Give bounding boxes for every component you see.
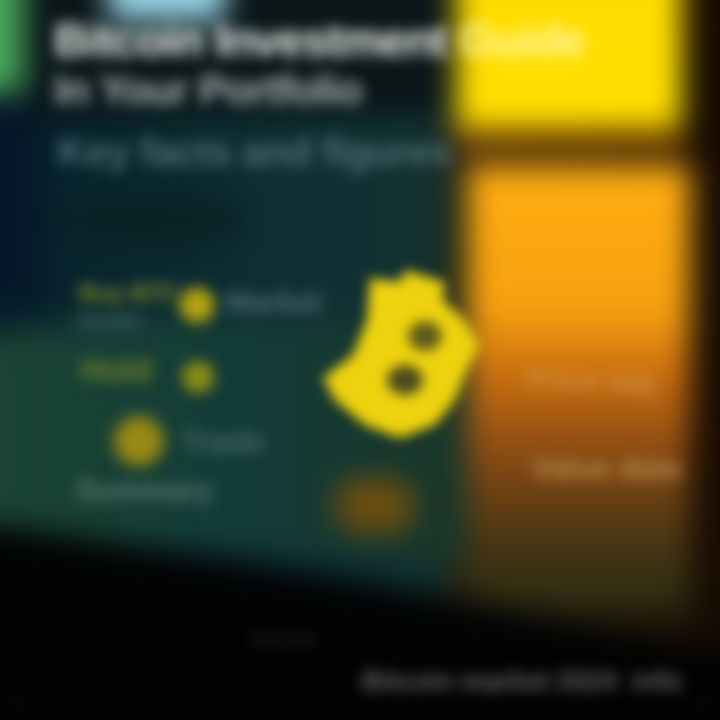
panel: yellow header block [456,0,682,130]
panel: dark band under subtitle [50,188,250,252]
text: Trade [182,424,265,459]
list row two [76,352,222,402]
right column labels [524,364,686,485]
orange glow below icon [335,478,415,533]
icon: bitcoin symbol [316,262,486,446]
footer left note: Source [250,628,318,650]
panel: right dark margin [696,0,720,720]
icon: coin dot [182,361,214,393]
label: Price tag [526,364,653,397]
panel: left dark strip [0,100,42,305]
list row three [74,406,266,508]
text: Summary [76,474,213,507]
title: In Your Portfolio [54,66,362,113]
title [46,13,592,114]
text: Market [225,286,322,319]
panel: black bottom band [0,525,720,720]
panel: lower-left green area [0,315,470,560]
label: Buy BTC [79,280,180,307]
title: Bitcoin Investment Guide [54,14,585,66]
panel: orange column [468,166,690,611]
panel: green corner [0,0,24,92]
footer right caption: Bitcoin market 2024 info [362,666,682,696]
icon: coin dot [179,287,215,323]
subtitle: Key facts and figures [58,131,452,174]
text: Details [77,310,143,332]
panel: dark gap [456,136,686,154]
list row one [72,276,325,332]
panel: top dark title band [25,0,455,115]
footer text [250,628,686,697]
label: Hold [81,352,152,388]
panel: light blue top patch [108,0,226,22]
label: Value data [532,452,680,485]
icon: coin dot [114,416,164,466]
